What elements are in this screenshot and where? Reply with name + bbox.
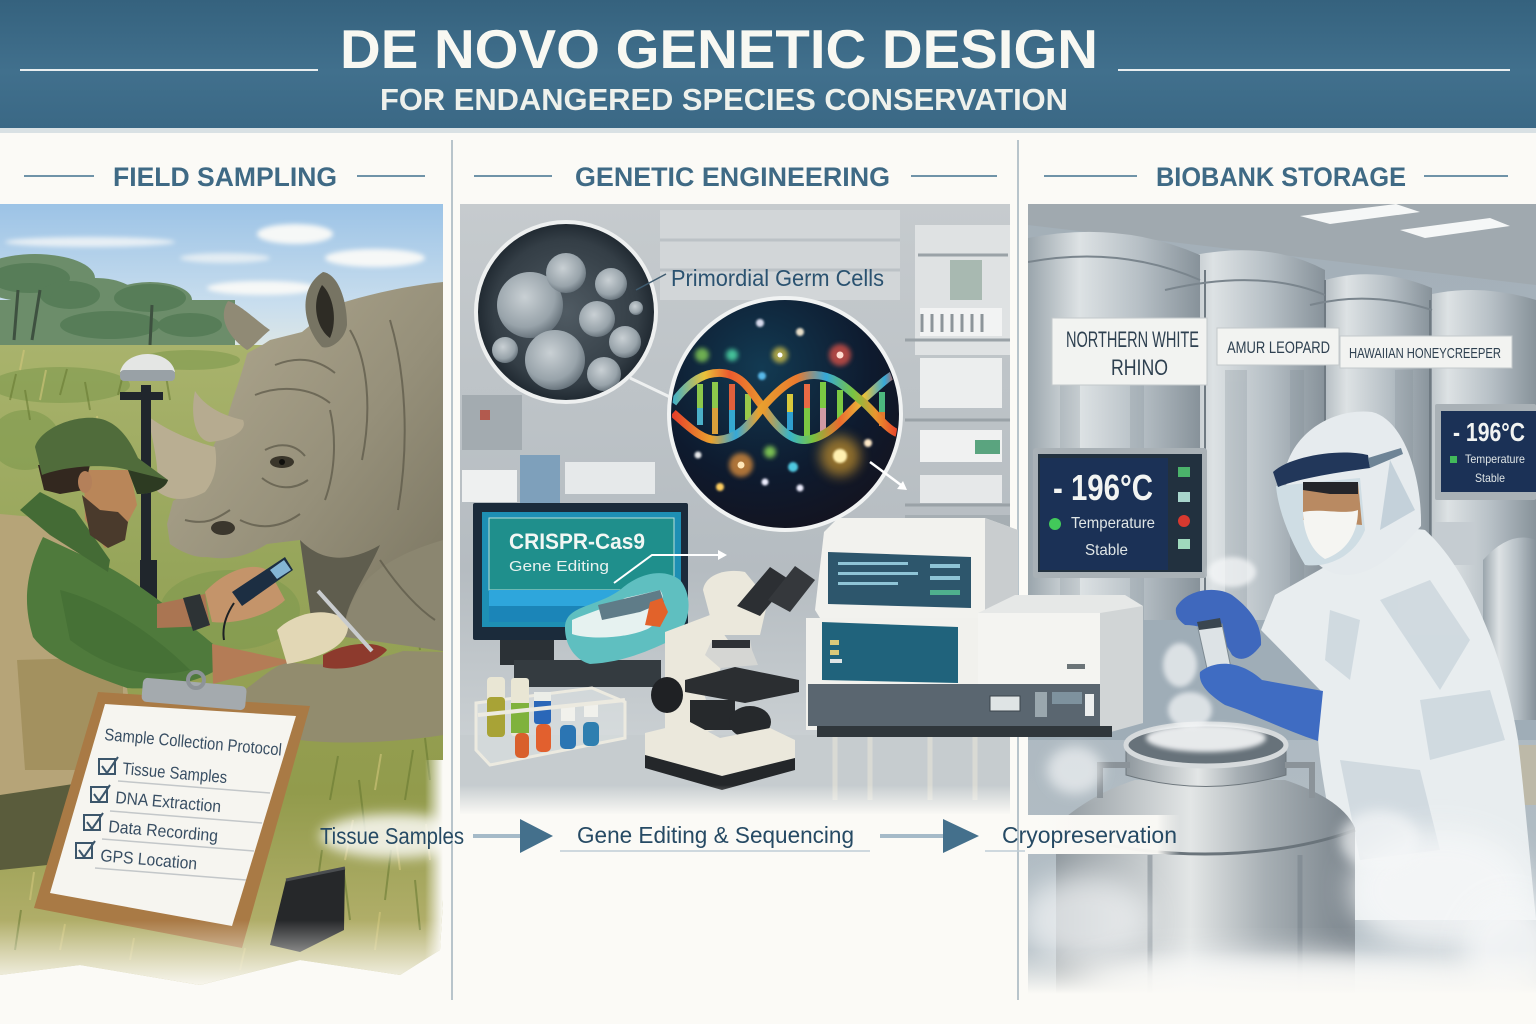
temperature monitor small <box>1435 404 1536 500</box>
column dividers <box>452 140 1018 1000</box>
flow step: tissue samples: Tissue Samples <box>320 823 464 849</box>
subtitle: FOR ENDANGERED SPECIES CONSERVATION <box>380 82 1068 117</box>
cryogenic vapor <box>1020 557 1536 1006</box>
counter <box>460 774 1010 792</box>
trousers <box>0 784 70 870</box>
background tank right <box>1483 538 1536 720</box>
monitor: CRISPR <box>473 503 688 687</box>
temperature monitor large <box>1033 448 1207 578</box>
sample protocol clipboard: Data Recording <box>108 817 219 846</box>
eye and nostril <box>270 456 294 468</box>
microscope <box>645 566 815 790</box>
sample protocol clipboard: Tissue Samples <box>122 759 228 787</box>
hood <box>1285 412 1421 575</box>
small horn <box>193 391 244 442</box>
microscope body <box>665 615 728 740</box>
connector between circles <box>630 378 672 398</box>
monitor: CRISPR: CRISPR-Cas9 <box>509 529 645 554</box>
lower unit <box>978 595 1143 730</box>
room background <box>1028 204 1536 994</box>
visor and face <box>1276 478 1365 565</box>
title: DE NOVO GENETIC DESIGN <box>340 18 1098 80</box>
lying rhino flank and wound <box>230 651 443 742</box>
control strip <box>808 684 1100 726</box>
arrow: tissue to gene editing <box>473 819 553 853</box>
eyepieces <box>737 567 790 616</box>
head and cap <box>84 470 137 548</box>
rhino body and head <box>167 282 443 651</box>
grass <box>0 345 443 985</box>
temperature monitor large: - 196°C <box>1053 467 1153 508</box>
forearm and glove <box>212 644 287 684</box>
DNA rungs <box>700 382 882 438</box>
flow step: cryopreservation: Cryopreservation <box>1002 822 1177 848</box>
suit body <box>1261 529 1536 920</box>
gloved hands and vial <box>1176 590 1261 659</box>
circle: primordial germ cells micrograph <box>476 222 656 402</box>
temperature monitor large: Temperature <box>1071 515 1155 532</box>
green shirt <box>27 537 213 688</box>
tank label: amur leopard <box>1217 328 1339 365</box>
focus knob <box>651 677 683 713</box>
monitor: CRISPR: Gene Editing <box>509 558 609 575</box>
base <box>645 722 795 776</box>
white halo behind flow label <box>320 814 470 858</box>
sky <box>0 204 443 345</box>
tan vest <box>0 514 135 795</box>
sparkles <box>820 436 860 476</box>
GPS pole <box>120 354 175 610</box>
temperature monitor small: Stable <box>1475 471 1505 485</box>
nosepiece <box>705 640 758 668</box>
sample protocol clipboard: GPS Location <box>100 846 198 873</box>
sequencer instrument <box>806 518 1143 737</box>
liquid nitrogen dewar <box>1056 724 1355 994</box>
big horn <box>148 416 216 499</box>
arrow: gene editing to cryopreservation <box>880 819 979 853</box>
heading: genetic engineering: GENETIC ENGINEERING <box>575 162 890 192</box>
acacia trees <box>0 254 237 350</box>
circle: DNA helix <box>669 298 907 530</box>
arrow from screen <box>614 550 727 583</box>
storage tanks <box>1028 232 1536 640</box>
tank label: northern white rhino: RHINO <box>1111 355 1168 380</box>
header banner <box>0 0 1536 133</box>
heading: field sampling: FIELD SAMPLING <box>113 162 337 192</box>
white label band <box>1028 815 1180 854</box>
heading: biobank storage: BIOBANK STORAGE <box>1156 162 1406 192</box>
floor and mid-ground <box>1028 620 1536 740</box>
test tube rack <box>476 677 625 765</box>
label: primordial germ cells: Primordial Germ Cells <box>671 265 884 291</box>
sample protocol clipboard: Sample Collection Protocol <box>104 725 283 759</box>
other forearm and watch <box>157 594 210 628</box>
panel: biobank storage room <box>1020 204 1536 1006</box>
temperature monitor large: Stable <box>1085 542 1128 559</box>
equipment case <box>270 868 345 952</box>
sample protocol clipboard: DNA Extraction <box>115 788 222 816</box>
field researcher <box>0 418 372 870</box>
shield band <box>1273 452 1370 487</box>
ears <box>305 272 347 348</box>
technician in protective suit <box>1176 412 1536 920</box>
sample protocol clipboard <box>34 672 310 948</box>
rhino <box>148 272 443 742</box>
lab background <box>460 204 1010 735</box>
stage <box>685 667 799 703</box>
tank label: amur leopard: AMUR LEOPARD <box>1227 338 1330 357</box>
dewar neck <box>1126 745 1286 786</box>
handheld GPS device <box>232 557 293 606</box>
panel: genetic engineering lab <box>460 204 1010 815</box>
upper unit <box>815 518 1018 618</box>
skin creases <box>185 320 435 620</box>
panel: field sampling scene <box>0 204 470 1000</box>
tank label: hawaiian honeycreeper <box>1340 336 1512 368</box>
tank label: northern white rhino <box>1052 318 1207 385</box>
Cas9 protein model <box>565 573 689 664</box>
tank label: northern white rhino: NORTHERN WHITE <box>1066 327 1199 352</box>
flow step: gene editing and sequencing: Gene Editing & Sequencing <box>577 822 854 848</box>
temperature monitor small: Temperature <box>1465 452 1525 466</box>
